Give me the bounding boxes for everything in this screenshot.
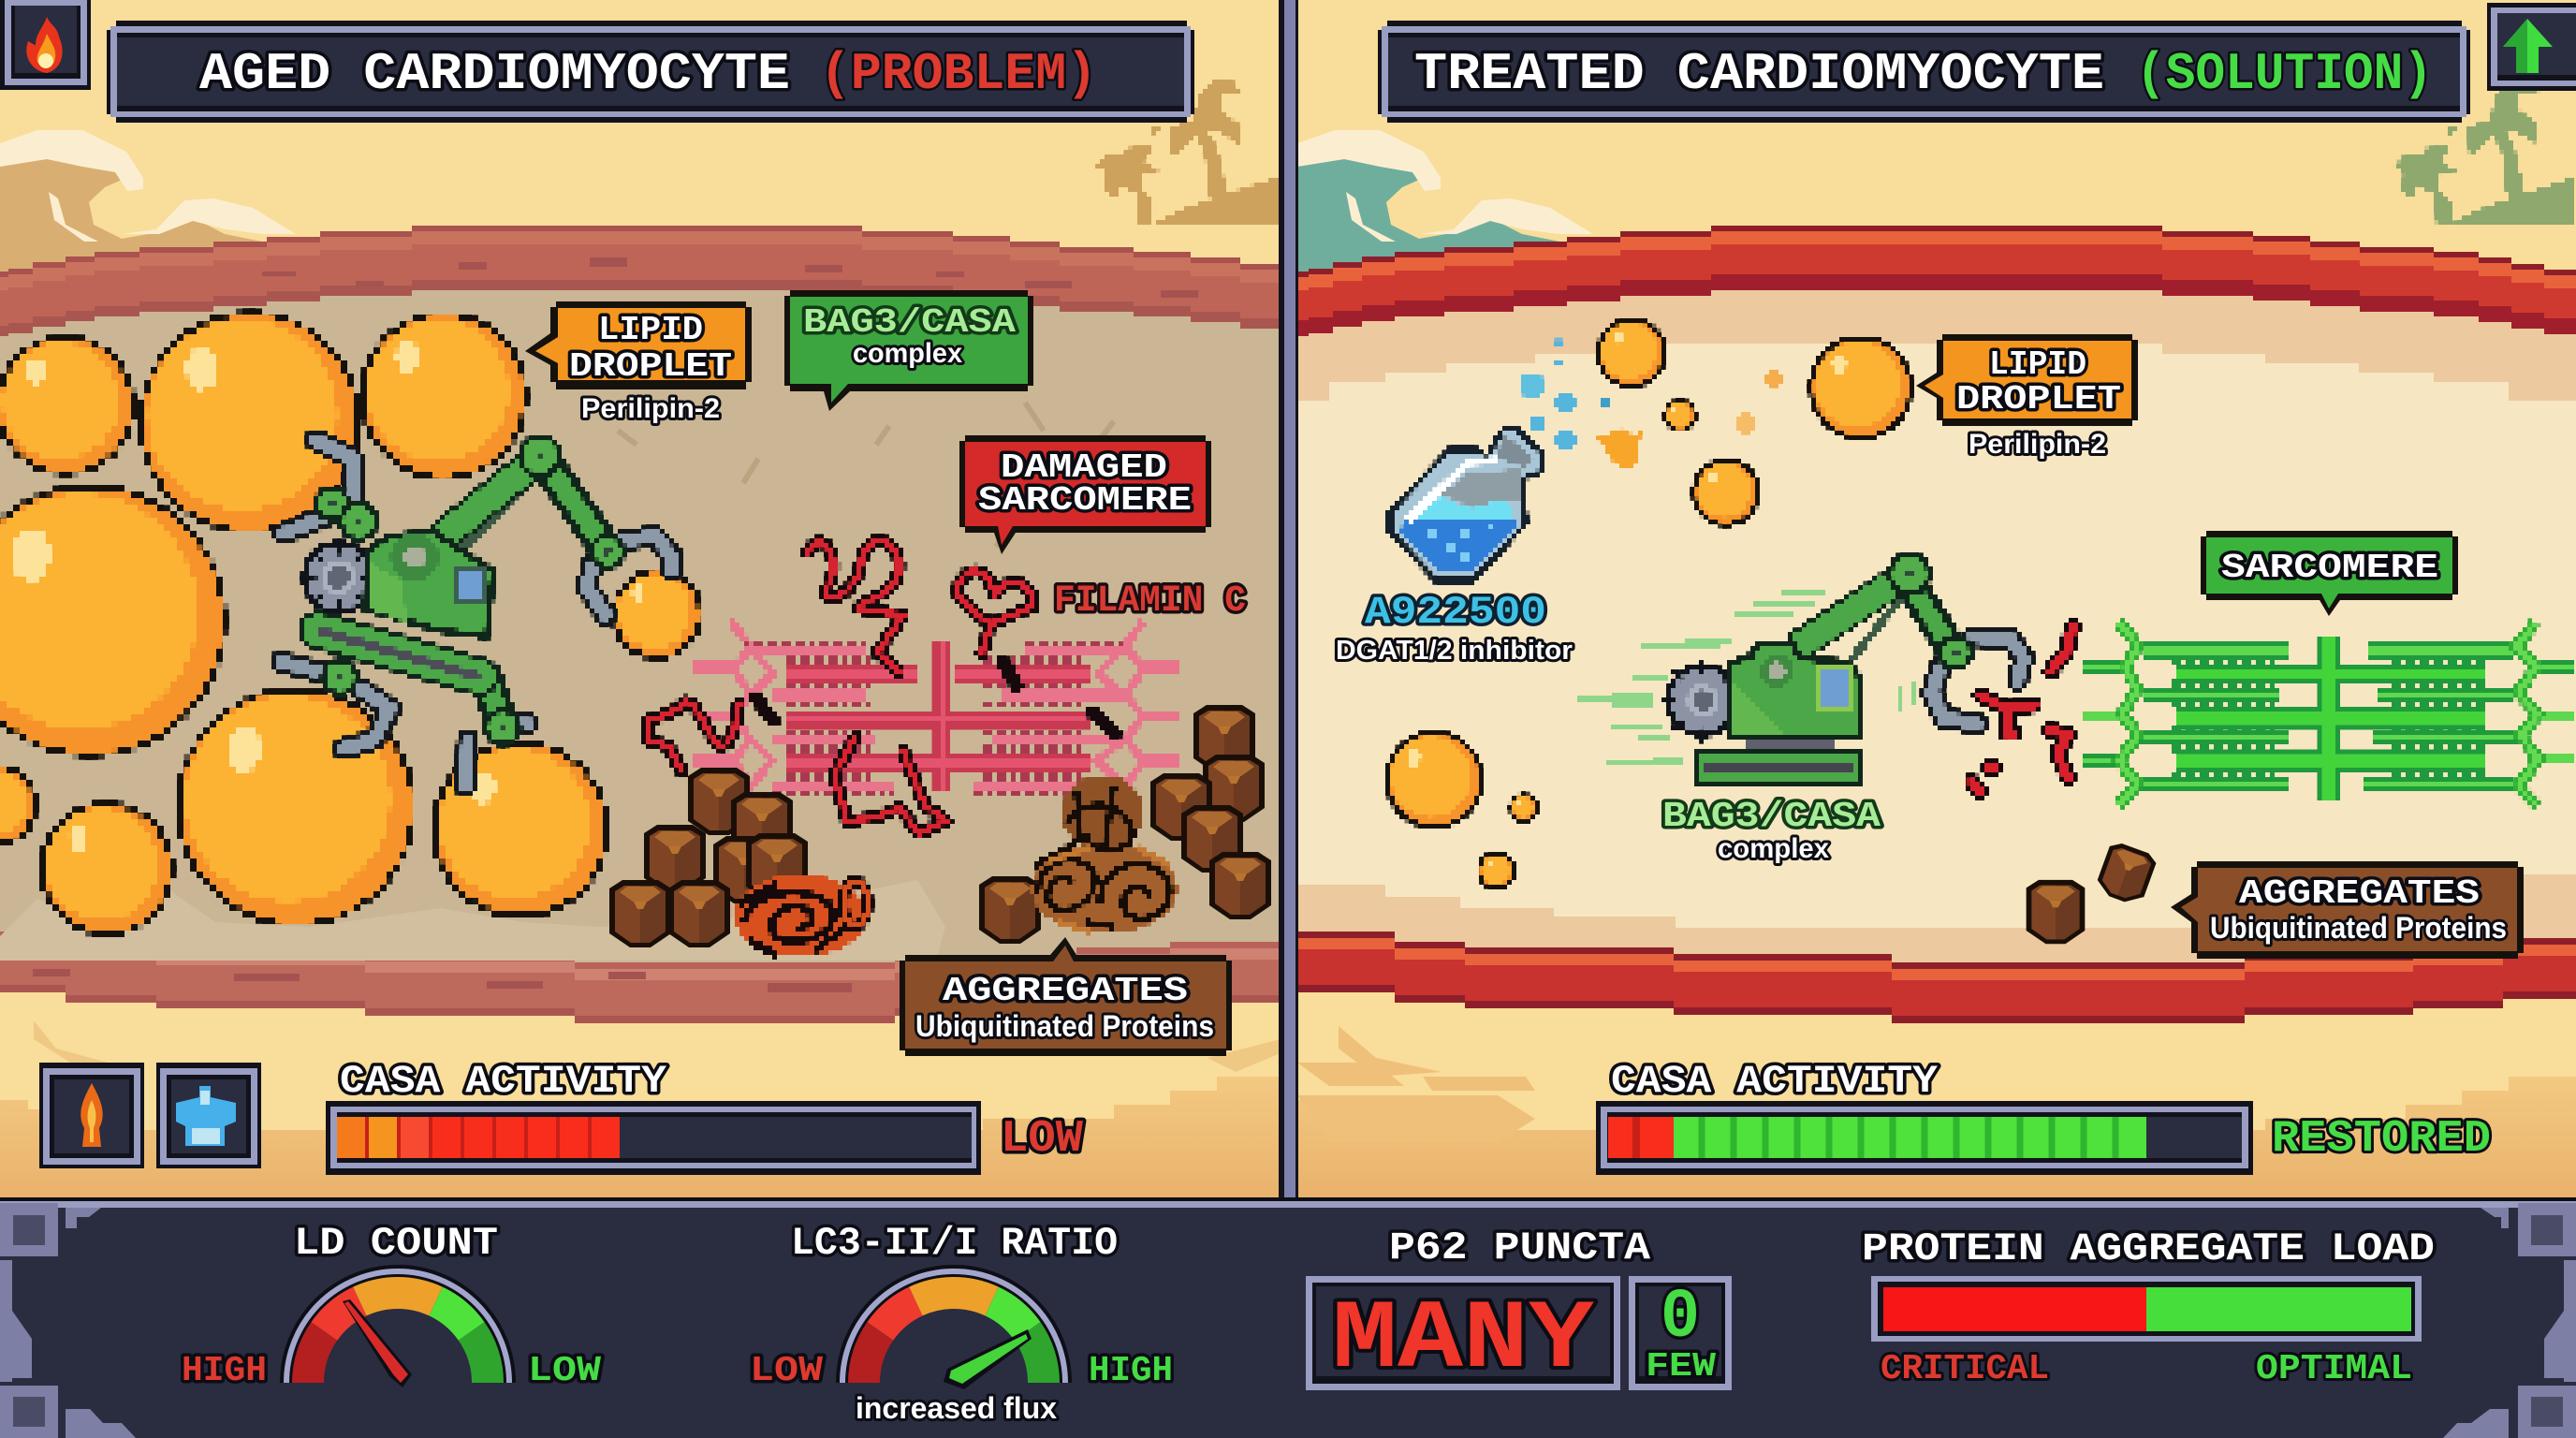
label: aggregates [900,937,1232,1056]
metric: p62 puncta counter: 0 [1661,1279,1700,1357]
aggregates pile: brown ubiquitinated protein cubes [609,705,1271,947]
small aggregates [2027,840,2159,944]
CASA activity label: CASA ACTIVITY [340,1059,667,1104]
label: damaged sarcomere: DAMAGED [1001,448,1167,487]
lipid droplets cluster [0,311,703,936]
cell interior [1297,226,2576,655]
label: sarcomere [2201,531,2458,616]
corner icon: fire [0,0,91,90]
metric: protein aggregate load bar [1862,1226,2435,1389]
icon box: drug bottle status [156,1063,261,1168]
background wave [0,130,296,271]
label: BAG3/CASA complex: complex [1718,833,1829,864]
background palm trees [2393,81,2576,226]
metric: protein aggregate load bar: CRITICAL [1881,1349,2049,1389]
metric: protein aggregate load bar: OPTIMAL [2256,1349,2412,1389]
label: sarcomere: SARCOMERE [2221,549,2438,587]
title banner: treated cardiomyocyte: TREATED CARDIOMYOCYTE [1414,44,2104,104]
metric: p62 puncta counter: FEW [1646,1347,1716,1386]
label: lipid droplet: DROPLET [569,347,732,386]
label: BAG3/CASA complex: complex [853,338,962,369]
label: lipid droplet: LIPID [598,311,703,349]
metric: LC3-II/I ratio gauge [750,1221,1173,1425]
label: lipid droplet: Perilipin-2 [581,393,720,424]
label: lipid droplet [1916,334,2138,460]
sky and sand background [0,0,1281,1198]
label: aggregates: Ubiquitinated Proteins [915,1009,1214,1043]
tangled aggregates: red and brown knots [735,775,1178,957]
label: BAG3/CASA complex: BAG3/CASA [803,303,1016,342]
label: lipid droplet: DROPLET [1956,380,2121,418]
label: lipid droplet: Perilipin-2 [1969,429,2106,460]
cell interior [0,226,1279,277]
label: lipid droplet [525,301,752,424]
label: A922500 inhibitor: DGAT1/2 inhibitor [1336,636,1573,666]
broken protein fragments [1972,627,2072,791]
title banner: treated cardiomyocyte: (SOLUTION) [2136,44,2433,104]
corner ornaments [0,1203,2576,1438]
label: aggregates: Ubiquitinated Proteins [2210,911,2507,945]
label: A922500 inhibitor [1336,590,1573,666]
metric: p62 puncta counter: P62 PUNCTA [1389,1225,1651,1270]
metric: LC3-II/I ratio gauge: LC3-II/I RATIO [791,1221,1118,1266]
lipid droplets shrinking [1384,317,1913,890]
label: damaged sarcomere: SARCOMERE [978,481,1192,520]
label: BAG3/CASA complex [1662,797,1881,864]
panel: treated cardiomyocyte (solution) [1297,0,2576,1198]
label: filamin C: FILAMIN C [1054,580,1246,623]
metric: p62 puncta counter: MANY [1332,1285,1595,1396]
metric: LD count gauge: LD COUNT [294,1221,498,1266]
drug bottle A922500 [1387,424,1546,583]
title banner: aged cardiomyocyte: (PROBLEM) [820,44,1097,104]
filamin C: red tangled filaments [647,541,1116,833]
label: BAG3/CASA complex: BAG3/CASA [1662,797,1881,837]
center divider [1279,0,1298,1200]
background wave [1297,130,1606,281]
label: A922500 inhibitor: A922500 [1365,590,1546,635]
panel: aged cardiomyocyte (problem) [0,0,1281,1198]
metric: LD count gauge [182,1221,601,1391]
label: BAG3/CASA complex [784,290,1033,411]
corner icon: green up arrow [2487,3,2576,91]
title banner: treated cardiomyocyte [1378,21,2470,123]
label: aggregates: AGGREGATES [943,972,1188,1010]
CASA activity label: CASA ACTIVITY [1611,1059,1939,1104]
metric: LC3-II/I ratio gauge: LOW [750,1351,823,1391]
BAG3/CASA crane gripping droplets [281,436,674,786]
icon box: fire status [39,1063,144,1168]
low status text: LOW [1001,1114,1083,1165]
healthy sarcomere lattice [2085,623,2576,805]
label: aggregates: AGGREGATES [2239,874,2480,913]
metric: LD count gauge: HIGH [182,1351,267,1391]
label: aggregates [2171,861,2524,959]
CASA activity bar: low [326,1101,981,1175]
metric: protein aggregate load bar: PROTEIN AGGREGATE LOAD [1862,1226,2435,1271]
sky and sand background [1297,0,2576,1198]
speed lines [1577,590,1916,765]
label: damaged sarcomere [959,435,1211,554]
metric: LD count gauge: LOW [528,1351,601,1391]
restored status text: RESTORED [2272,1114,2491,1165]
CASA activity bar: restored [1596,1101,2253,1175]
metric: LC3-II/I ratio gauge: HIGH [1089,1351,1173,1391]
title banner: aged cardiomyocyte: AGED CARDIOMYOCYTE [199,44,790,104]
BAG3/CASA crane active [1663,554,2024,785]
background palm trees [1095,81,1281,226]
metric: LC3-II/I ratio gauge: increased flux [856,1391,1057,1425]
label: lipid droplet: LIPID [1989,345,2086,384]
metric: p62 puncta counter [1306,1225,1732,1396]
damaged sarcomere lattice [695,620,1181,805]
title banner: aged cardiomyocyte [107,21,1194,123]
panel: bottom metrics dashboard [0,1197,2576,1438]
medicine bubbles [1519,339,1610,450]
